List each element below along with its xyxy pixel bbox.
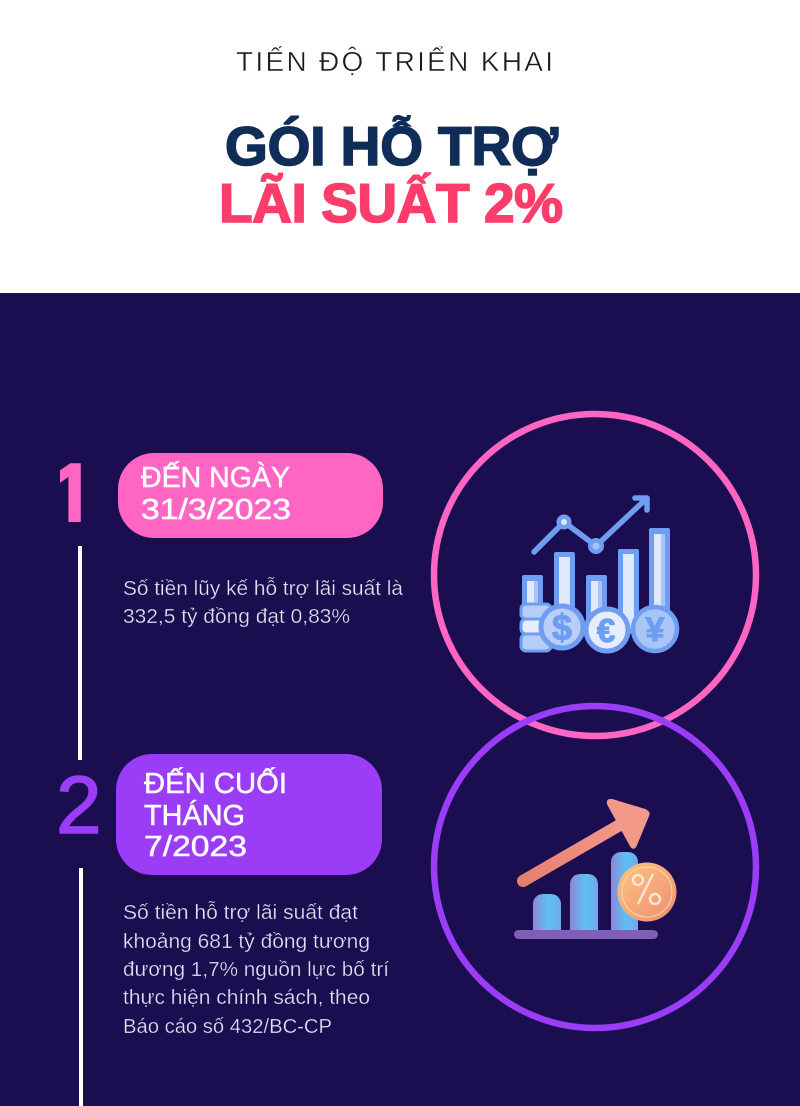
step 2 pill [116, 754, 382, 875]
step 2 pill: THÁNG [144, 799, 245, 832]
header panel [0, 0, 800, 293]
step 1 pill [118, 453, 383, 538]
title line 1: GÓI HỖ TRỢ [225, 115, 558, 177]
step 2 body text: Báo cáo số 432/BC-CP [123, 1016, 332, 1038]
step 1 body text [123, 577, 404, 628]
ring: pink [434, 414, 756, 736]
icon: rising bars, arrow and percent coin [514, 800, 676, 939]
dark background panel [0, 293, 800, 1106]
icon: bars, coins and trend line [521, 498, 677, 651]
connector line 1 [78, 546, 82, 760]
step 2 pill: 7/2023 [144, 831, 247, 863]
icon: bars, coins and trend line: ¥ [646, 611, 665, 649]
step 2 body text: khoảng 681 tỷ đồng tương [123, 931, 370, 953]
step 1 pill: ĐẾN NGÀY [141, 460, 290, 494]
step 1 body text: 332,5 tỷ đồng đạt 0,83% [123, 606, 350, 628]
icon: bars, coins and trend line: € [597, 612, 615, 649]
step 2 number: 2 [56, 760, 102, 851]
step 1 number: 1 [45, 444, 101, 556]
step 1 body text: Số tiền lũy kế hỗ trợ lãi suất là [123, 577, 404, 600]
step 2 pill: ĐẾN CUỐI [144, 766, 287, 800]
step 2 body text: đương 1,7% nguồn lực bố trí [123, 959, 389, 981]
kicker heading: TIẾN ĐỘ TRIỂN KHAI [236, 46, 553, 77]
step 2 body text: thực hiện chính sách, theo [123, 987, 370, 1009]
step 2 body text: Số tiền hỗ trợ lãi suất đạt [123, 901, 358, 924]
icon: bars, coins and trend line: $ [552, 607, 572, 648]
step 2 body text [123, 901, 389, 1038]
connector line 2 [79, 868, 83, 1106]
ring: purple [434, 706, 756, 1028]
title line 2: LÃI SUẤT 2% [219, 172, 563, 234]
step 1 pill: 31/3/2023 [141, 494, 291, 526]
